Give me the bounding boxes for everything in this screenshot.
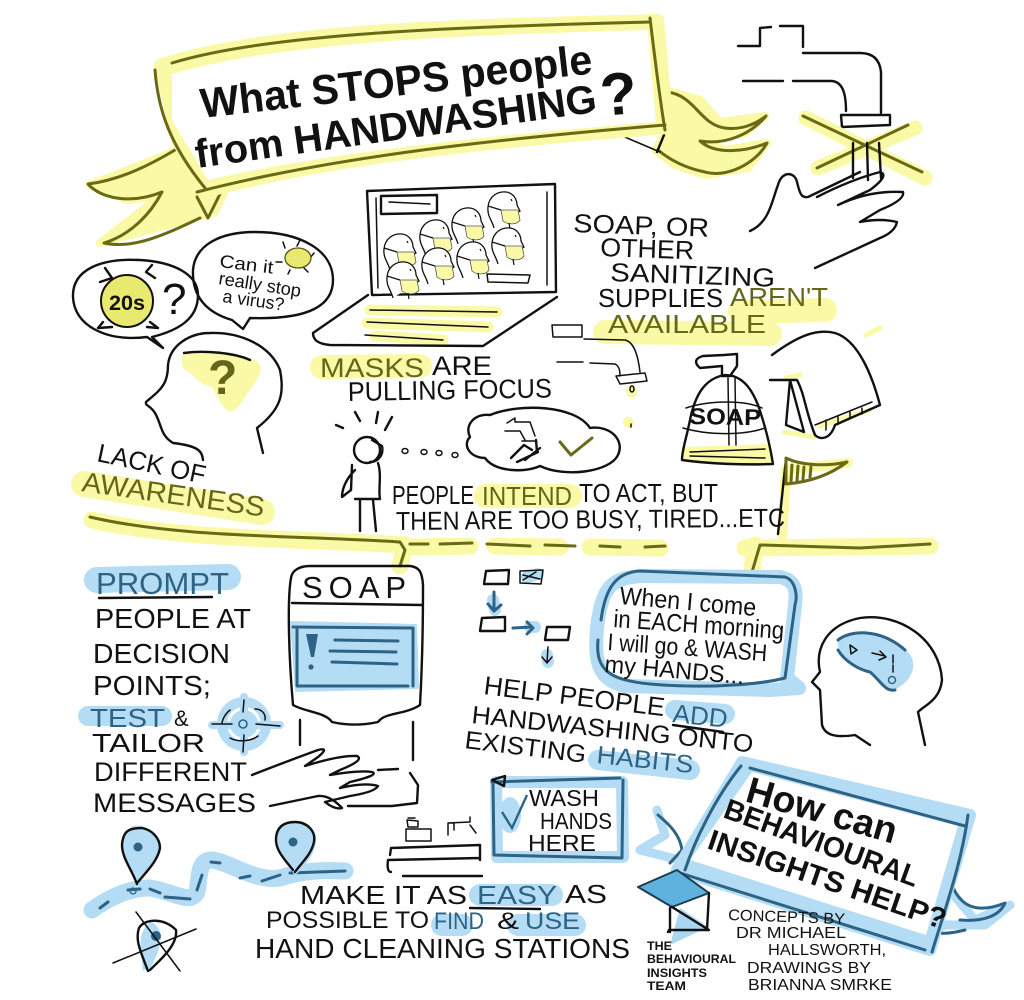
banner tails [640,810,1010,935]
speech bubble: can it stop a virus: really stop [217,268,302,301]
label: prompt people at decision points: & [174,706,189,731]
yellow cross [803,116,925,180]
label: prompt people at decision points: TAILOR [92,728,205,758]
sign: wash hands here: HERE [528,830,596,856]
flowchart icon [480,570,570,663]
label: make it as easy as possible: POSSIBLE TO [266,907,429,934]
label: prompt people at decision points [88,566,256,818]
speech bubble: timer [73,260,198,348]
label: masks are pulling focus: MASKS [320,353,424,383]
speech bubble: can it stop a virus [193,232,333,329]
label: masks are pulling focus [320,351,552,407]
title text: What STOPS people [198,36,594,127]
dispenser body [289,566,423,760]
laptop screen [367,184,556,295]
speech bubble: timer: ? [162,275,186,324]
label: prompt people at decision points: DECISION [93,638,230,669]
brain [838,633,913,690]
banner body [677,762,970,952]
route [92,860,345,910]
logo: the behavioural insights team [638,870,736,993]
surprise marks [336,412,392,430]
person [342,437,382,531]
speech bubble: can it stop a virus: Can it [219,251,275,278]
label: make it as easy as possible: & [497,908,519,935]
label: make it as easy as possible: AS [565,879,607,909]
label: help people add handwashing: HANDWASHING ONTO [470,701,755,759]
icon: target [212,697,280,752]
credits: HALLSWORTH, [768,942,886,959]
title text [192,36,640,177]
icon: head with question mark [146,333,282,460]
label: make it as easy as possible: MAKE IT AS [300,880,467,910]
label: make it as easy as possible: EASY [477,880,557,910]
label: help people add handwashing: EXISTING [463,726,588,769]
speech bubble: when I come in [596,571,799,690]
dispenser body: SOAP [302,570,406,605]
bubble text: my HANDS... [603,651,745,690]
title text: ? [597,59,640,129]
icon: thinking person [336,408,620,531]
label: masks are pulling focus: ARE [432,351,492,381]
pin 1 [122,826,160,884]
label: make it as easy as possible: USE [525,908,580,935]
faucet [738,26,890,127]
laptop base [313,295,557,346]
text: soap unavailable: AREN'T [730,282,828,312]
icon: soap dispenser with hand [252,566,423,808]
banner right tail [620,90,767,175]
icon: soap bottle: SOAP [689,403,761,430]
label: help people add handwashing [463,670,755,779]
icon: soap bottle [682,354,773,464]
label: people intend to act: INTEND [482,481,572,511]
label: make it as easy as possible [255,879,630,964]
brain: ? [208,352,237,405]
text: soap unavailable: SOAP, OR [573,208,710,243]
label: people intend to act: TO ACT, BUT [579,478,718,508]
label: prompt people at decision points: PROMPT [96,566,229,601]
sign: wash hands here: WASH [529,785,599,811]
bubble text [603,582,785,690]
logo: the behavioural insights team: INSIGHTS [647,968,707,980]
bubble text: When I come [618,582,757,622]
icon: head with habit loop brain [812,617,942,745]
label: lack of awareness [80,438,267,523]
banner left tail [88,150,225,245]
thought cloud [467,408,620,472]
logo: the behavioural insights team: BEHAVIOURAL [647,954,736,966]
banner text: How can [742,769,902,851]
label: lack of awareness: AWARENESS [80,466,267,523]
credits: DRAWINGS BY [747,960,871,977]
divider between problems and solutions [90,517,930,572]
thought dots [402,448,458,458]
pin 2 [276,822,316,875]
banner text [704,769,951,936]
text: soap unavailable: SANITIZING [610,257,776,293]
location pins and route [92,822,345,971]
banner body [155,18,668,192]
label: people intend to act [392,478,785,536]
bubble text: I will go & WASH [607,629,768,667]
icon: towel [770,328,880,438]
text: soap unavailable [573,208,828,339]
label: prompt people at decision points: PEOPLE AT [95,603,251,634]
label: lack of awareness: LACK OF [95,438,209,490]
text: soap unavailable: SUPPLIES [598,283,723,313]
logo: the behavioural insights team: THE [647,941,672,953]
credits: DR MICHAEL [736,925,846,942]
sign: wash hands here: HANDS [540,808,612,834]
label: make it as easy as possible: FIND [434,908,484,935]
icon: crossed-out faucet and hand [738,26,925,268]
logo: the behavioural insights team: TEAM [647,981,686,993]
label: help people add handwashing: ADD [671,698,729,734]
banner text: BEHAVIOURAL [720,794,923,894]
icon: alarm clock: 20s [109,292,145,315]
crossed out pin [113,912,196,971]
masked faces [384,192,524,299]
bubble text: in EACH morning [613,605,785,645]
label: make it as easy as possible: HAND CLEANING STATIONS [255,933,630,964]
alert panel [291,622,418,691]
label: prompt people at decision points: POINTS; [93,670,211,701]
title text: from HANDWASHING [192,77,599,177]
icon: laptop with masked faces [313,184,557,346]
credits [728,907,892,994]
label: prompt people at decision points: DIFFERENT [94,757,247,787]
title banner [88,18,767,245]
text: soap unavailable: AVAILABLE [608,309,766,339]
credits: CONCEPTS BY [728,907,845,928]
label: prompt people at decision points: MESSAGES [93,788,256,818]
behavioural insights banner [640,762,1010,952]
label: masks are pulling focus: PULLING FOCUS [348,373,552,407]
label: help people add handwashing: HABITS [595,741,695,779]
text: soap unavailable: OTHER [600,232,695,265]
banner text: INSIGHTS HELP? [704,824,951,936]
goal flag [778,458,848,540]
credits: BRIANNA SMRKE [748,977,892,994]
label: people intend to act: PEOPLE [392,480,474,510]
hand under dispenser [252,749,418,808]
sign: wash hands here [492,776,623,858]
label: people intend to act: THEN ARE TOO BUSY, TIRED...ETC [396,503,785,536]
icon: dripping faucet [552,325,647,427]
speech bubble: can it stop a virus: a virus? [221,286,286,315]
label: help people add handwashing: HELP PEOPLE [482,670,667,722]
icon: sink [388,817,482,876]
hand [750,172,903,268]
label: prompt people at decision points: TEST [90,703,165,733]
icon: virus [276,240,314,274]
